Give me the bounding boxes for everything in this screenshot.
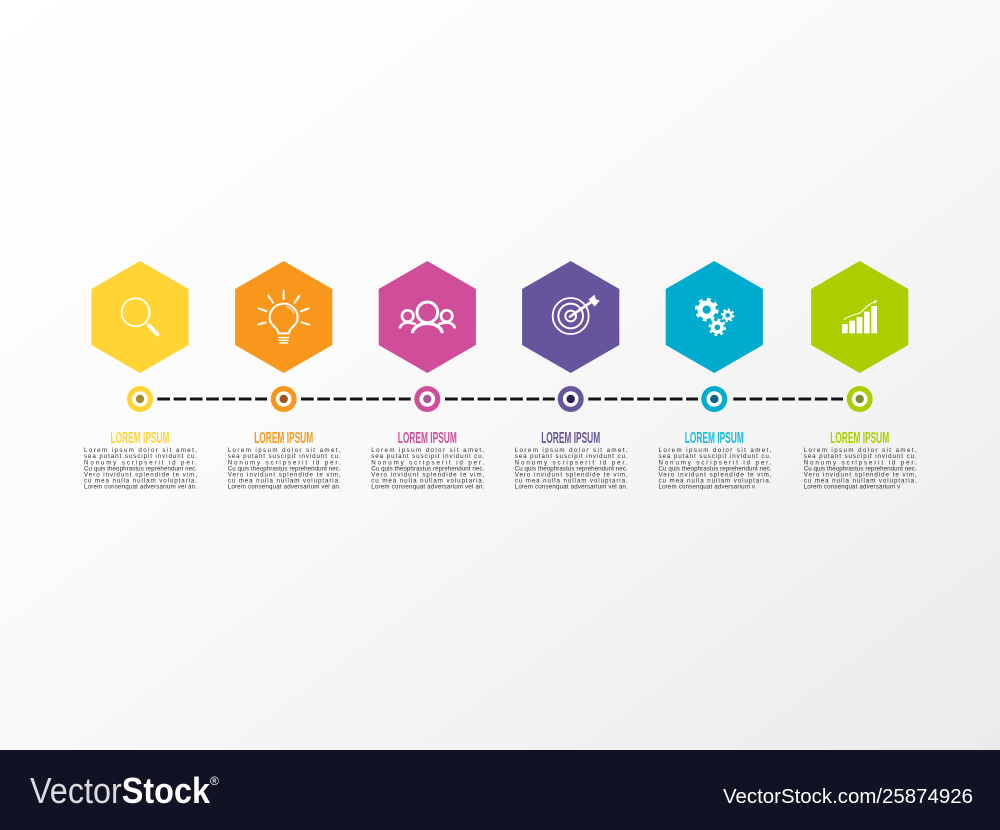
text block: step 2 (228, 430, 341, 491)
step 2: orange idea (228, 261, 341, 491)
text block: step 5: cu mea nulla nullam voluptaria. (658, 478, 772, 485)
icon: target with arrow (553, 295, 600, 334)
footer bar (0, 750, 1000, 830)
step 5: blue gears (658, 261, 772, 491)
text block: step 5: LOREM IPSUM (685, 430, 744, 447)
step 6: green growth (804, 261, 917, 491)
timeline dashed connector (157, 398, 843, 400)
text block: step 6 (804, 430, 917, 491)
hexagon: yellow (91, 261, 189, 373)
text block: step 3 (371, 430, 485, 491)
icon: rising bar chart (842, 300, 878, 333)
text block: step 2: LOREM IPSUM (254, 430, 313, 447)
text block: step 6: sea putant suscipit invidunt cu. (804, 453, 917, 460)
hexagon: orange (235, 261, 332, 373)
footer image id: VectorStock.com/25874926 (723, 785, 973, 808)
text block: step 1: Cu quis theophrastus reprehendunt nec. (84, 465, 197, 472)
text block: step 4: Lorem consenquat adversarium vel an. (515, 484, 628, 491)
text block: step 4: Lorem ipsum dolor sit amet, (515, 447, 628, 454)
text block: step 3: Cu quis theophrastus reprehendunt nec. (371, 465, 485, 472)
hexagon: blue (666, 261, 763, 373)
text block: step 2: Lorem ipsum dolor sit amet, (228, 447, 341, 454)
icon: light bulb (258, 291, 309, 343)
icon: group of people (400, 302, 455, 332)
text block: step 6: Lorem consenquat adversarium v (804, 484, 901, 491)
step 1: yellow search (84, 261, 197, 491)
timeline node: blue (701, 386, 727, 412)
text block: step 2: cu mea nulla nullam voluptaria. (228, 478, 341, 485)
text block: step 3: Nonumy scripserit id per. (371, 459, 485, 466)
text block: step 5: Lorem ipsum dolor sit amet, (658, 447, 772, 454)
text block: step 2: Vero invidunt splendide te vim, (228, 472, 341, 478)
text block: step 2: Cu quis theophrastus reprehendunt nec. (228, 465, 341, 472)
text block: step 2: Nonumy scripserit id per. (228, 459, 341, 466)
text block: step 1 (84, 430, 197, 491)
text block: step 5: Lorem consenquat adversarium v (658, 484, 756, 491)
icon: magnifying glass (122, 298, 157, 334)
text block: step 4: sea putant suscipit invidunt cu. (515, 453, 628, 460)
text block: step 3: LOREM IPSUM (398, 430, 457, 447)
text block: step 2: Lorem consenquat adversarium vel an. (228, 484, 341, 491)
text block: step 4: Nonumy scripserit id per. (515, 459, 628, 466)
text block: step 4: cu mea nulla nullam voluptaria. (515, 478, 628, 485)
step 4: purple target (515, 261, 628, 491)
text block: step 3: Lorem ipsum dolor sit amet, (371, 447, 485, 454)
text block: step 6: Cu quis theophrastus reprehendunt nec. (804, 465, 917, 472)
timeline node: green (847, 386, 873, 412)
text block: step 2: sea putant suscipit invidunt cu. (228, 453, 341, 460)
timeline node: pink (414, 386, 440, 412)
text block: step 1: Nonumy scripserit id per. (84, 459, 197, 466)
text block: step 3: sea putant suscipit invidunt cu. (371, 453, 485, 460)
text block: step 4: Vero invidunt splendide te vim, (515, 472, 628, 478)
text block: step 1: Lorem consenquat adversarium vel an. (84, 484, 197, 491)
text block: step 4: Cu quis theophrastus reprehendunt nec. (515, 465, 628, 472)
text block: step 6: LOREM IPSUM (830, 430, 889, 447)
footer logo: VectorStock (30, 770, 211, 811)
text block: step 3: cu mea nulla nullam voluptaria. (371, 478, 485, 485)
hexagon: green (811, 261, 908, 373)
text block: step 3: Vero invidunt splendide te vim, (371, 472, 485, 478)
text block: step 5 (658, 430, 772, 491)
step 3: pink team (371, 261, 485, 491)
text block: step 4 (515, 430, 628, 491)
hexagon: pink (379, 261, 476, 373)
timeline node: yellow (127, 386, 153, 412)
text block: step 5: sea putant suscipit invidunt cu. (658, 453, 772, 460)
text block: step 6: Lorem ipsum dolor sit amet, (804, 447, 917, 454)
text block: step 5: Cu quis theophrastus reprehendunt nec. (658, 465, 772, 472)
footer registered mark: ® (210, 774, 219, 788)
icon: three gears (697, 300, 733, 335)
hexagon: purple (522, 261, 619, 373)
text block: step 1: Vero invidunt splendide te vim, (84, 472, 197, 478)
text block: step 1: Lorem ipsum dolor sit amet, (84, 447, 197, 454)
timeline node: purple (558, 386, 584, 412)
text block: step 6: cu mea nulla nullam voluptaria. (804, 478, 917, 485)
text block: step 1: LOREM IPSUM (110, 430, 170, 447)
text block: step 5: Nonumy scripserit id per. (658, 459, 772, 466)
text block: step 5: Vero invidunt splendide te vim, (658, 472, 772, 478)
text block: step 4: LOREM IPSUM (541, 430, 600, 447)
text block: step 1: cu mea nulla nullam voluptaria. (84, 478, 197, 485)
text block: step 6: Nonumy scripserit id per. (804, 459, 917, 466)
timeline node: orange (271, 386, 297, 412)
text block: step 1: sea putant suscipit invidunt cu. (84, 453, 197, 460)
text block: step 6: Vero invidunt splendide te vim, (804, 472, 917, 478)
text block: step 3: Lorem consenquat adversarium vel an. (371, 484, 485, 491)
